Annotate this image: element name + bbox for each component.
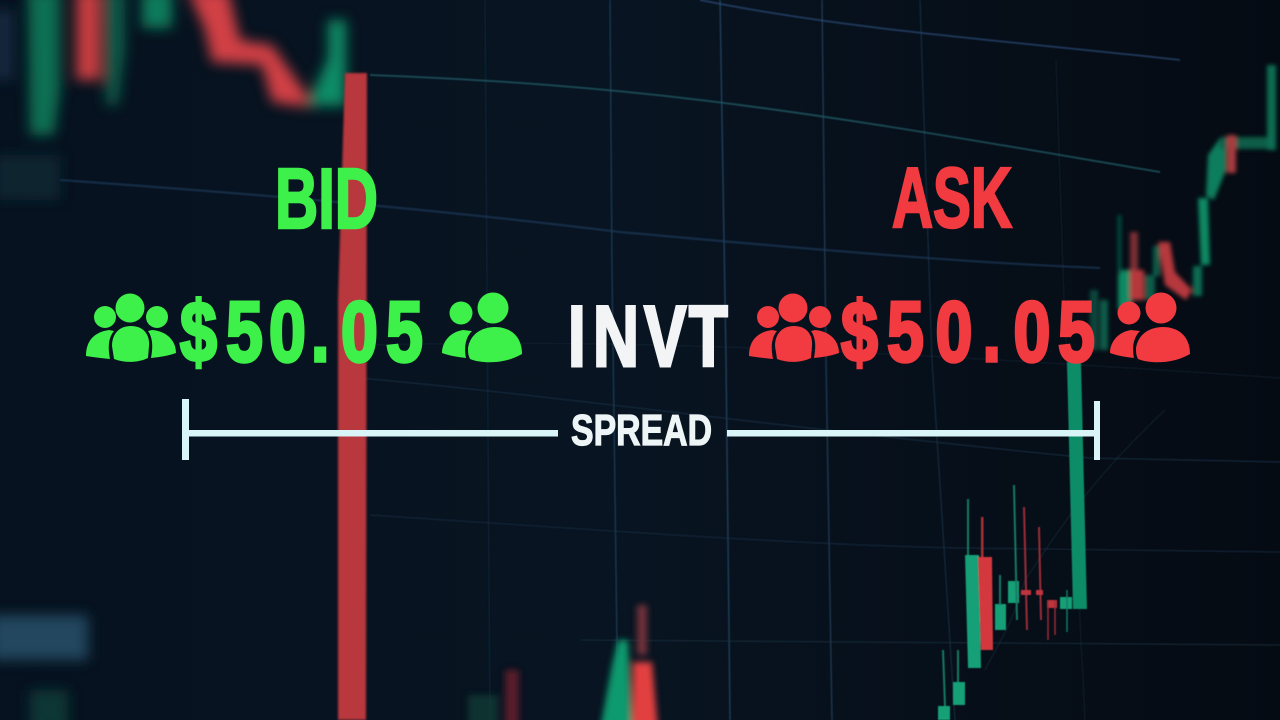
- spread bracket: [182, 399, 1100, 460]
- label: SPREAD: SPREAD: [571, 406, 712, 455]
- blurred candles bottom centre: [468, 605, 658, 720]
- icon: red three people: [749, 294, 839, 362]
- icon: red two people: [1110, 292, 1190, 362]
- ask price: $50.05: [841, 285, 1095, 380]
- icon: green two people: [442, 292, 522, 362]
- ticker: INVT: INVT: [568, 290, 728, 385]
- bid price: $50.05: [180, 285, 423, 380]
- icon: green three people: [86, 294, 176, 362]
- heading: ASK: ASK: [892, 151, 1012, 246]
- sharp candles bottom right: [938, 362, 1087, 720]
- blurred candles upper right: [1090, 65, 1276, 350]
- long red candle: [338, 73, 367, 720]
- blurred candles top left: [0, 0, 346, 720]
- heading: BID: BID: [275, 152, 378, 247]
